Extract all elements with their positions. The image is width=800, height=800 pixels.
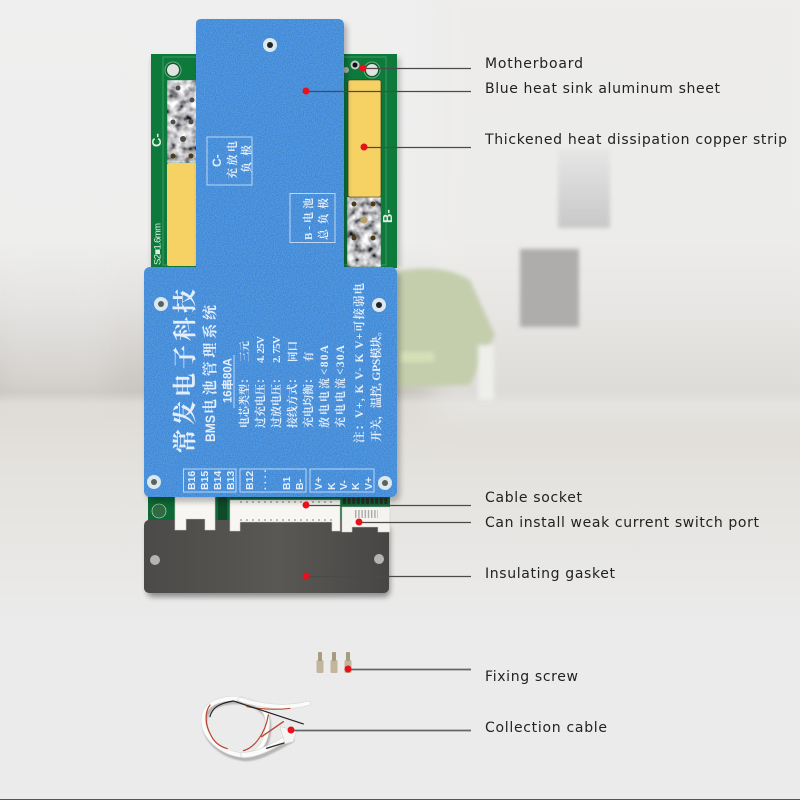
board model: 16串80A (220, 358, 234, 403)
callout: copper strip (360, 132, 787, 150)
label: C-: 充放电 (225, 141, 239, 179)
terminal box: B1 to B12: B- (294, 478, 306, 490)
callout: weak current switch port: Can install weak current switch port (485, 515, 760, 531)
specifications: 接线方式： (285, 373, 299, 428)
specifications: 同口 (287, 341, 299, 362)
label: B-: B-电池 (301, 198, 315, 240)
callout: blue heat sink aluminum sheet: Blue heat sink aluminum sheet (485, 81, 720, 97)
specifications: 2. 75V (271, 336, 283, 363)
label: C-: C- (210, 154, 224, 167)
specifications: 放电电流 (317, 377, 331, 428)
board subtitle: BMS (202, 415, 218, 442)
weak current switch port (342, 507, 390, 532)
terminal box: B1 to B12: B12 (244, 471, 256, 490)
blue heat sink aluminum sheet: top (196, 19, 347, 272)
callout: motherboard (360, 56, 583, 72)
terminal box: V+ K V- K V+: K (326, 482, 338, 490)
terminal box: B13 to B16: B16 (186, 471, 198, 490)
label: B-: 总负极 (316, 198, 330, 240)
callout: collection cable (288, 720, 607, 736)
mounting holes (165, 60, 380, 78)
specifications: <30A (335, 344, 347, 375)
board marks: B- (380, 209, 395, 223)
callout: fixing screw: Fixing screw (485, 669, 578, 685)
board subtitle: 电池管理系统 (201, 304, 219, 414)
insulating gasket (144, 520, 390, 597)
board note: 开关，温控, GPS模块。 (369, 325, 383, 442)
board note: 注：V+, K V- K V+可接弱电 (352, 282, 366, 443)
terminal box: B1 to B12 (240, 469, 306, 492)
callout: motherboard: Motherboard (485, 56, 583, 72)
terminal box: V+ K V- K V+: K (350, 482, 362, 490)
specifications: 充电电流 (333, 377, 347, 428)
screw hole (263, 38, 277, 52)
screw holes (147, 297, 392, 490)
specifications: <80A (319, 344, 331, 375)
board marks: C- (149, 133, 164, 147)
specifications: 有 (302, 351, 315, 362)
callout: insulating gasket: Insulating gasket (485, 566, 616, 582)
terminal box: B13 to B16 (184, 469, 237, 492)
label: C- (207, 137, 253, 185)
terminal box: B13 to B16: B15 (199, 471, 211, 490)
blue heat sink aluminum sheet: bottom (144, 267, 400, 502)
specifications: 过充电压： (253, 373, 267, 428)
terminal box: B1 to B12: . . . . (257, 469, 269, 490)
collection cable (203, 698, 308, 758)
fixing screws (316, 652, 352, 673)
copper strip right (348, 80, 381, 197)
terminal box: B13 to B16: B13 (225, 471, 237, 490)
silver solder right (347, 197, 381, 267)
specifications: 电芯类型： (237, 373, 251, 428)
callout: insulating gasket (302, 566, 616, 582)
specifications: 4. 25V (255, 336, 267, 363)
board note (352, 282, 383, 443)
terminal box: B13 to B16: B14 (212, 471, 224, 490)
terminal box: V+ K V- K V+: V+ (363, 477, 375, 490)
lower board and connectors (148, 495, 390, 525)
motherboard (149, 54, 400, 268)
specifications: 过放电压： (269, 373, 283, 428)
callout: weak current switch port (356, 515, 760, 531)
terminal box: B1 to B12: B1 (281, 476, 293, 490)
terminal box: V+ K V- K V+: V- (338, 480, 350, 490)
copper strip left (167, 163, 197, 266)
pin header (343, 498, 388, 504)
callout: blue heat sink aluminum sheet (302, 81, 720, 97)
callout: fixing screw (344, 666, 578, 685)
specifications: 充电均衡： (301, 373, 315, 428)
silver solder left (167, 80, 197, 163)
callout: cable socket: Cable socket (485, 490, 582, 506)
socket: B1 to B12 (230, 500, 340, 531)
specifications (237, 336, 347, 428)
terminal box: V+ K V- K V+: V+ (313, 477, 325, 490)
cable sockets (175, 497, 390, 532)
callout: cable socket (302, 490, 582, 508)
label: C-: 负极 (239, 145, 253, 173)
board marks: S2■1.6mm (152, 223, 164, 265)
terminal box: V+ K V- K V+ (310, 469, 375, 492)
specifications: 三元 (239, 341, 251, 362)
label: B- (290, 194, 335, 242)
board marks (149, 133, 395, 265)
callout: collection cable: Collection cable (485, 720, 607, 736)
socket: B13 to B16 (175, 497, 215, 530)
callout: copper strip: Thickened heat dissipation copper strip (484, 132, 787, 148)
board title: 常发电子科技 (172, 285, 199, 453)
